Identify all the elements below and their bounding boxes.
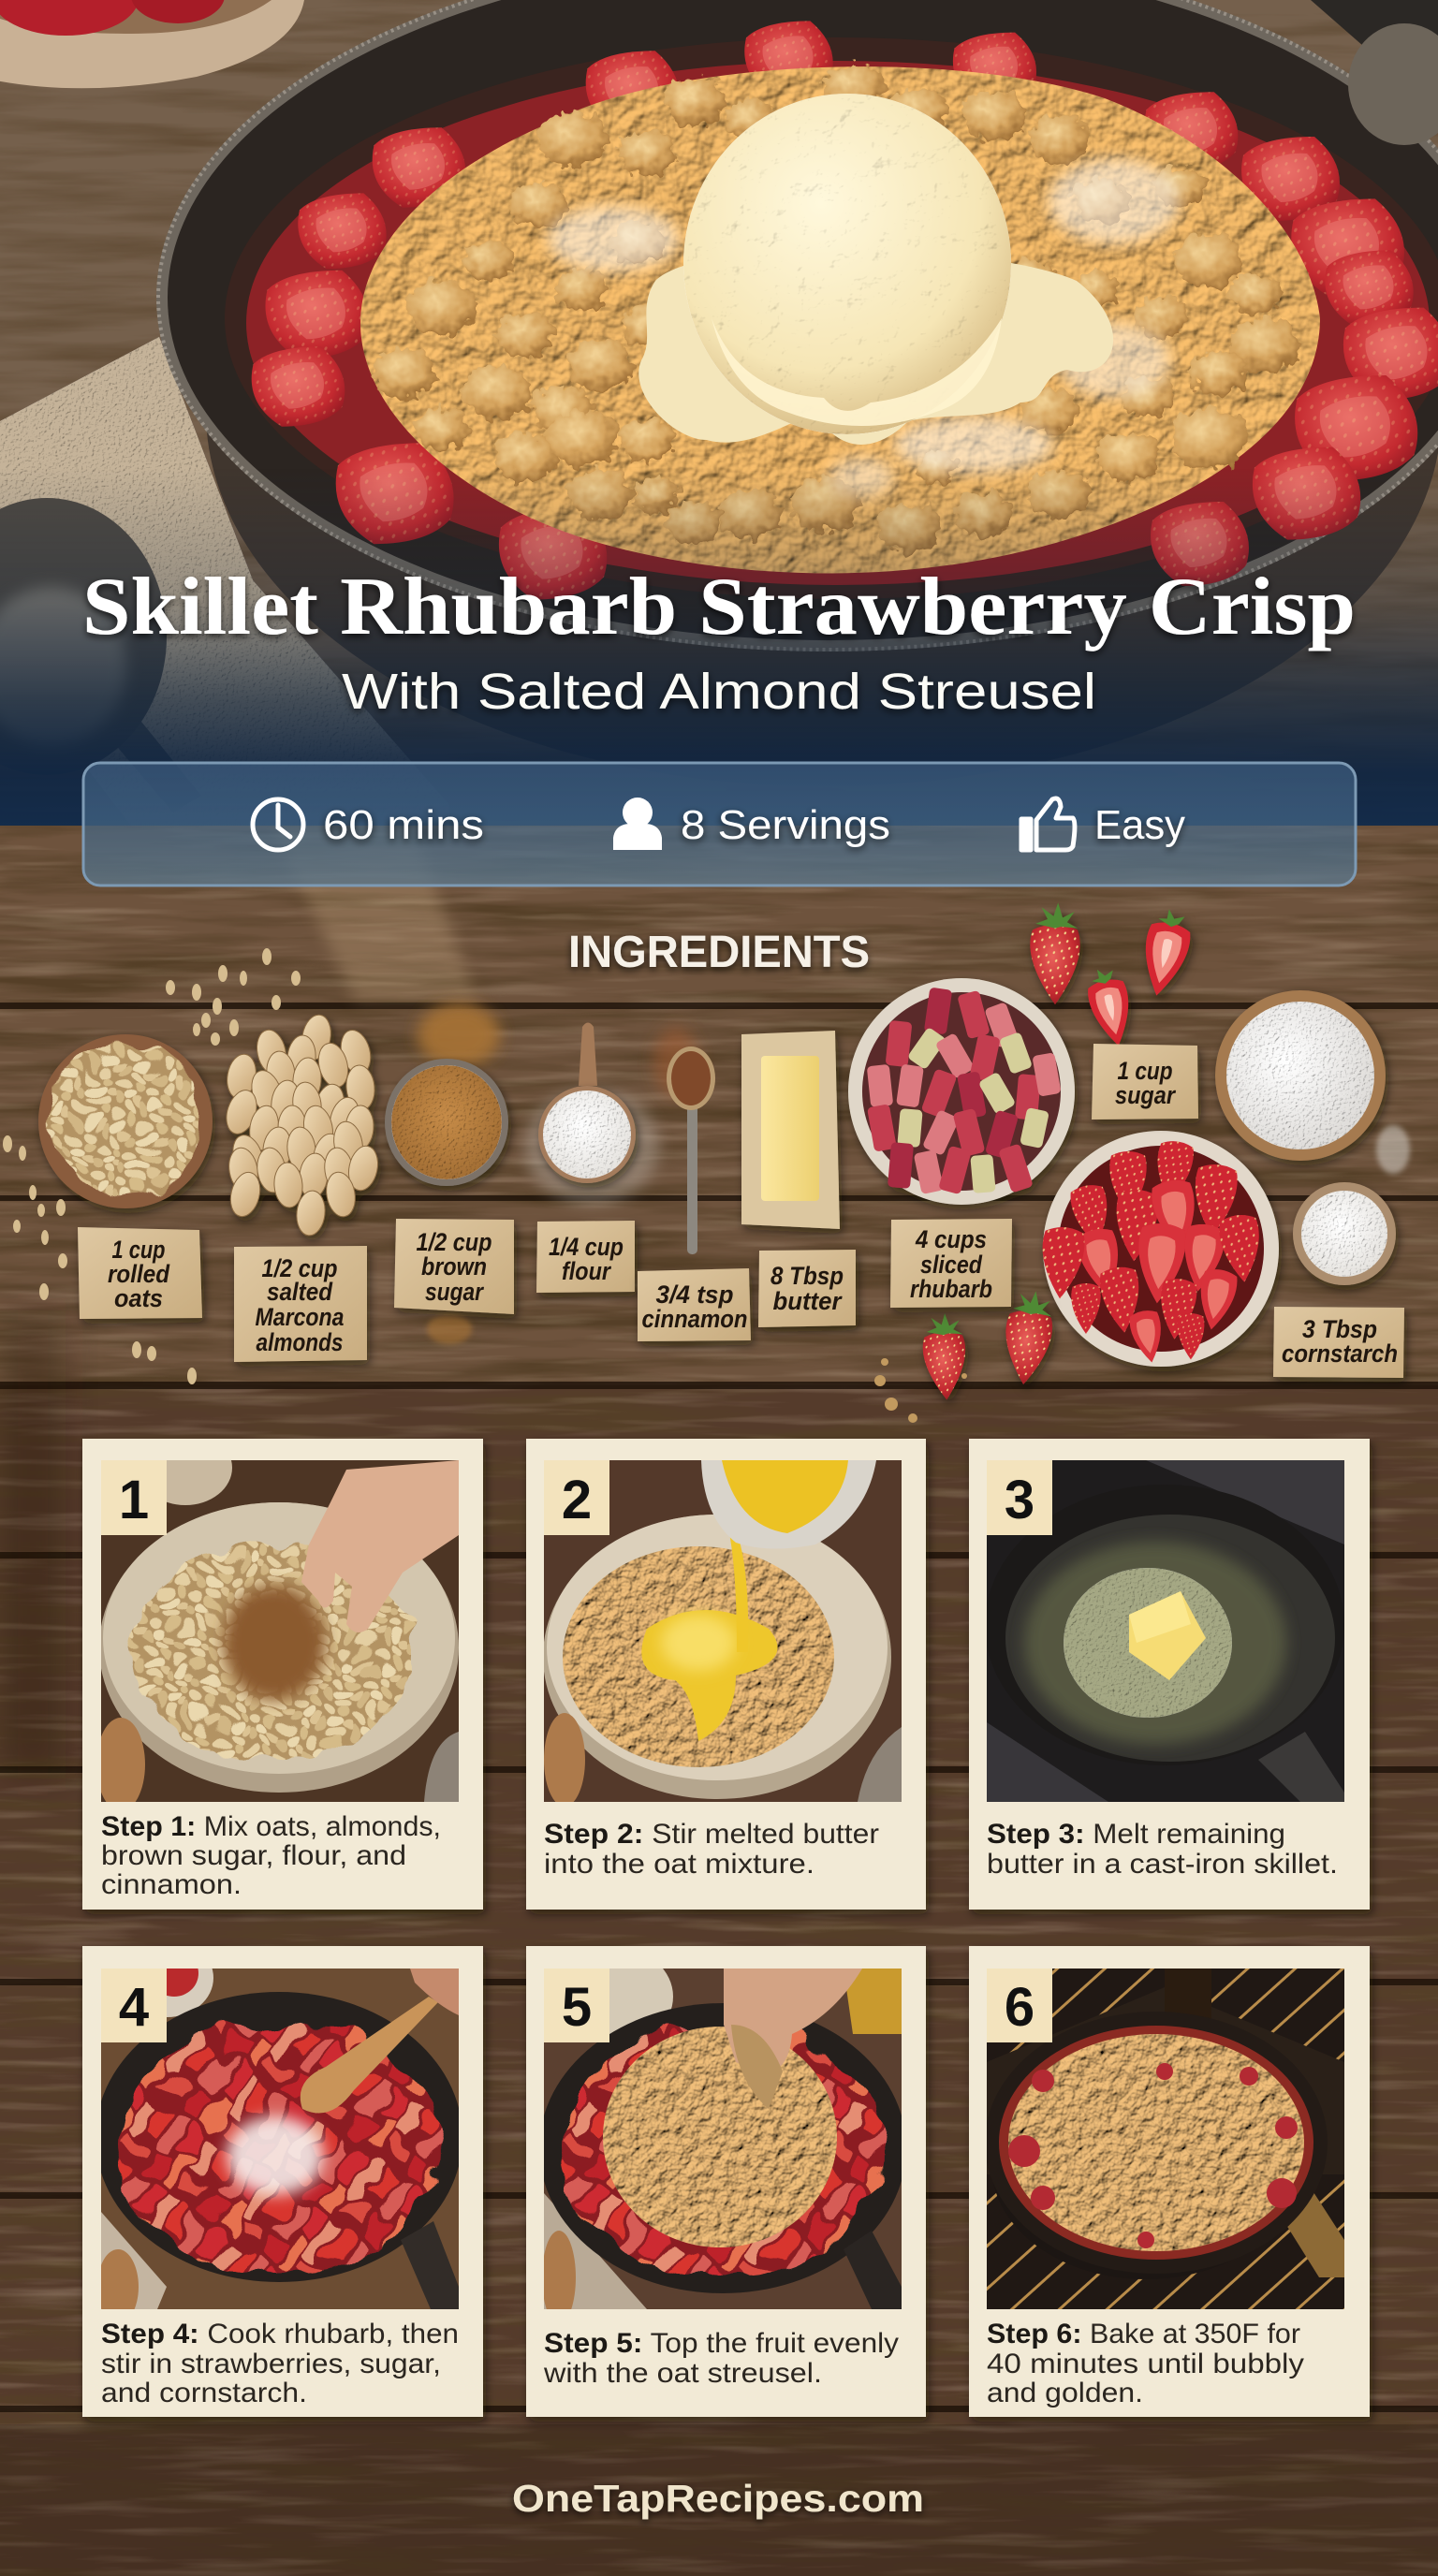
step 4 text: [101, 2319, 459, 2408]
note: 1/2 cup brown sugar: 1/2 cup: [416, 1228, 492, 1256]
note: 1 cup rolled oats: [78, 1227, 202, 1319]
note: 8 Tbsp butter: 8 Tbsp: [770, 1262, 844, 1290]
note: 1 cup sugar: 1 cup: [1118, 1057, 1172, 1085]
note: 1/2 cup brown sugar: [394, 1219, 514, 1314]
note: 4 cups sliced rhubarb: [890, 1219, 1012, 1308]
step 6 text: and golden.: [987, 2378, 1143, 2408]
step 6 photo: [987, 1969, 1344, 2309]
number 1: [101, 1460, 167, 1535]
step 3 text: [987, 1819, 1338, 1880]
step 4 text: and cornstarch.: [101, 2378, 307, 2408]
number 3: [987, 1460, 1052, 1535]
step 2 text: Step 2: Stir melted butter: [544, 1819, 879, 1850]
ingredient: flour measuring cup: [524, 1022, 659, 1205]
subtitle: With Salted Almond Streusel: [342, 664, 1096, 720]
note: 1 cup rolled oats: rolled: [108, 1260, 169, 1288]
step 4 photo: [101, 1969, 459, 2309]
oat crumble topping: [360, 66, 1320, 574]
footer website: OneTapRecipes.com: [512, 2477, 924, 2520]
number 4: 4: [119, 1977, 149, 2038]
step 4 text: Step 4: Cook rhubarb, then: [101, 2319, 459, 2349]
panel: step 4: [82, 1939, 483, 2417]
number 4: [101, 1969, 167, 2042]
note: 3/4 tsp cinnamon: [638, 1268, 751, 1341]
note: 1 cup rolled oats: 1 cup: [112, 1236, 165, 1264]
step 4 text: stir in strawberries, sugar,: [101, 2349, 441, 2379]
ingredient: brown sugar bowl: [385, 1059, 508, 1186]
note: 4 cups sliced rhubarb: 4 cups: [915, 1225, 987, 1253]
number 5: [544, 1969, 609, 2042]
step 6 text: Step 6: Bake at 350F for: [987, 2319, 1300, 2349]
ingredient: butter: [741, 1031, 840, 1229]
note: 4 cups sliced rhubarb: sliced: [920, 1251, 982, 1279]
dark navy overlay: [0, 468, 1438, 826]
step 5 photo: [544, 1969, 902, 2309]
brown sugar pile: [418, 1003, 500, 1344]
number 2: [544, 1460, 609, 1535]
step 3 text: butter in a cast-iron skillet.: [987, 1849, 1338, 1880]
linen napkin: [0, 337, 449, 826]
crumble clusters: [372, 64, 1299, 552]
number 1: 1: [119, 1470, 149, 1530]
ingredients heading: INGREDIENTS: [568, 928, 870, 977]
fruit filling: [246, 61, 1430, 585]
step 5 text: [543, 2328, 899, 2389]
step 2 text: into the oat mixture.: [544, 1849, 814, 1880]
step 5 text: Step 5: Top the fruit evenly: [544, 2328, 899, 2359]
skillet rim: [156, 0, 1438, 651]
time: 60 mins: [323, 802, 484, 848]
note: 3 Tbsp cornstarch: [1273, 1307, 1404, 1378]
step 1 text: Step 1: Mix oats, almonds,: [101, 1811, 441, 1842]
step 2 photo: [544, 1460, 902, 1802]
number 5: 5: [562, 1977, 592, 2038]
ingredient: almonds: [221, 1013, 382, 1237]
crumbs: [874, 1358, 967, 1423]
note: 1/2 cup salted Marcona almonds: almonds: [257, 1328, 343, 1356]
note: 1/4 cup flour: [536, 1221, 635, 1293]
step 6 text: [987, 2319, 1304, 2408]
number 3: 3: [1005, 1470, 1034, 1530]
note: 1 cup sugar: [1092, 1044, 1198, 1120]
step 3 photo: [987, 1460, 1344, 1802]
step 1 photo: [101, 1460, 459, 1802]
note: 1 cup sugar: sugar: [1115, 1081, 1176, 1109]
panel: step 1: [82, 1430, 483, 1910]
number 6: 6: [1005, 1977, 1034, 2038]
ingredient: sugar bowl: [1215, 990, 1386, 1161]
loose strawberries: [921, 902, 1196, 1401]
step 1 text: brown sugar, flour, and: [101, 1840, 406, 1871]
panel: step 2: [526, 1439, 926, 1910]
note: 1/4 cup flour: flour: [562, 1257, 611, 1285]
ingredient: rhubarb bowl: [848, 978, 1075, 1205]
hero photo: skillet crisp with ice cream: [0, 0, 1438, 826]
panel: step 6: [969, 1946, 1370, 2417]
ingredient: cinnamon spoon: [653, 1027, 715, 1254]
number 2: 2: [562, 1470, 592, 1530]
note: 1/2 cup brown sugar: sugar: [425, 1278, 484, 1306]
icon: thumbs up: [1021, 798, 1075, 850]
note: 8 Tbsp butter: [758, 1250, 856, 1327]
note: 1 cup rolled oats: oats: [114, 1284, 163, 1312]
serving spoon: [0, 498, 201, 812]
ingredient: strawberries bowl: [1039, 1131, 1279, 1367]
powdered sugar: [548, 159, 1180, 498]
title: Skillet Rhubarb Strawberry Crisp: [82, 562, 1356, 652]
icon: person: [613, 798, 662, 850]
skillet body: [206, 37, 1438, 786]
ingredient: cornstarch bowl: [1293, 1182, 1396, 1285]
side bowl of strawberries: [0, 0, 304, 88]
step 2 text: [544, 1819, 879, 1880]
difficulty: Easy: [1094, 802, 1185, 848]
note: 4 cups sliced rhubarb: rhubarb: [910, 1275, 992, 1303]
scattered oats: [3, 948, 301, 1384]
note: 1/2 cup salted Marcona almonds: [234, 1246, 367, 1362]
step 3 text: Step 3: Melt remaining: [987, 1819, 1285, 1850]
note: 1/2 cup salted Marcona almonds: salted: [267, 1278, 332, 1306]
step 5 text: with the oat streusel.: [543, 2358, 822, 2389]
note: 3 Tbsp cornstarch: 3 Tbsp: [1302, 1315, 1377, 1343]
info bar: [83, 763, 1356, 886]
panel: step 3: [969, 1439, 1370, 1910]
ingredient: oats bowl: [38, 1034, 213, 1208]
note: 1/2 cup salted Marcona almonds: Marcona: [255, 1303, 345, 1331]
note: 1/2 cup salted Marcona almonds: 1/2 cup: [262, 1254, 337, 1282]
panel: step 5: [526, 1946, 926, 2417]
step 6 text: 40 minutes until bubbly: [987, 2349, 1304, 2379]
note: 3/4 tsp cinnamon: cinnamon: [642, 1305, 747, 1333]
note: 1/2 cup brown sugar: brown: [421, 1252, 487, 1281]
ice cream scoop: [638, 94, 1113, 445]
number 6: [987, 1969, 1052, 2042]
note: 3/4 tsp cinnamon: 3/4 tsp: [655, 1281, 734, 1309]
step 1 text: [101, 1811, 441, 1900]
strawberries around edge: [252, 21, 1438, 600]
servings: 8 Servings: [681, 802, 890, 848]
icon: clock: [253, 799, 303, 850]
step 1 text: cinnamon.: [101, 1869, 242, 1900]
note: 8 Tbsp butter: butter: [773, 1287, 843, 1315]
note: 3 Tbsp cornstarch: cornstarch: [1282, 1339, 1398, 1368]
note: 1/4 cup flour: 1/4 cup: [549, 1233, 624, 1261]
